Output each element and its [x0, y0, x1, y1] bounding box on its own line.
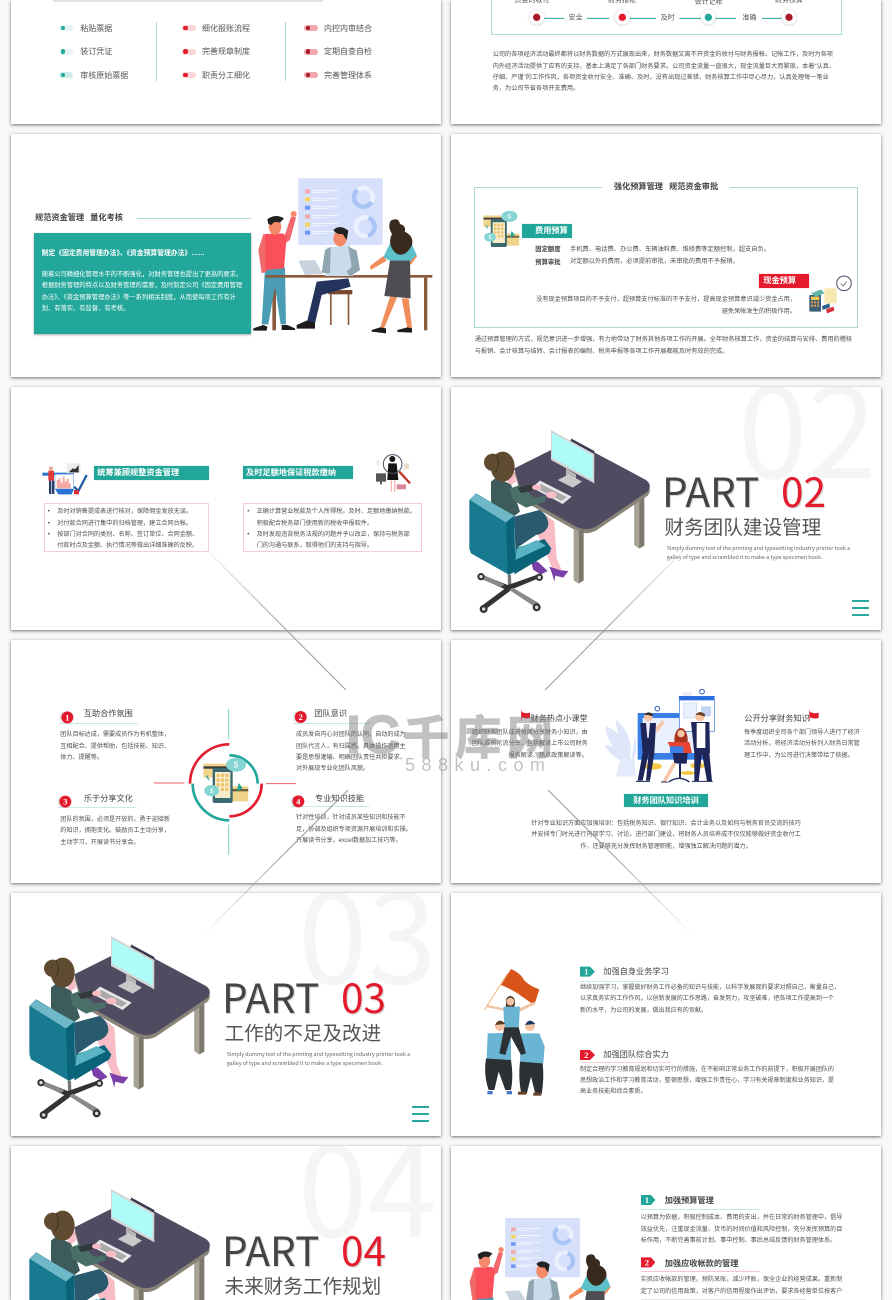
tag: expense budget: 费用预算	[535, 226, 568, 235]
part heading	[222, 966, 386, 1025]
icons	[42, 454, 411, 494]
item 4 text: 开展读书分享，excel数据加工技巧等。	[296, 837, 402, 844]
text: fund list: 对付款合同进行集中的归档管理，建立合同台帐。	[57, 520, 192, 527]
budget rows: 预算审批	[535, 259, 560, 266]
illustration and flags	[521, 688, 819, 782]
item 2 text: 思想政治工作和学习教育活动，整顿思想，增强工作责任心，学习有关规章制度和业务知识，提	[580, 1078, 834, 1084]
left text: 团队成员轮流分享，包括解读上市公司财务	[472, 740, 588, 747]
timeline nodes and labels: 及时	[661, 13, 675, 22]
panel: part 02 cover	[451, 387, 881, 630]
box title: 制定《固定费用管理办法》、《资金预算管理办法》……	[42, 250, 205, 257]
left text: 报表解读、热点政策解读等。	[508, 752, 588, 759]
timeline frame	[491, 0, 842, 34]
column 3: internal control	[304, 24, 372, 80]
item 1 text: 互相配合、提供帮助，包括技能、知识、	[60, 743, 170, 750]
box paragraph: 随着公司精细化管理水平的不断强化，对财务管理也提出了更高的要求。	[42, 271, 242, 278]
training paragraph	[531, 820, 801, 850]
item 2 text: 实抓应收帐款的管理，预防呆账，减少坏账，保全企业的经营成果。重新制	[641, 1276, 842, 1283]
part subtitle: 未来财务工作规划	[224, 1270, 381, 1299]
budget rows	[535, 245, 770, 266]
diagram: rings and numbered badges: 1	[65, 713, 69, 722]
part heading: PART	[662, 460, 759, 519]
item 4 text: 针对性培训，针对成员某些知识和技能不	[296, 814, 406, 821]
item 3 text: 的知识，拥抱变化。鼓励员工主动分享，	[60, 827, 170, 834]
summary paragraph: 公司的各项经济活动最终都将以财务数据的方式展现出来，财务数据又离不开资金的收付与财务报帐、记帐工作，及时为各项	[493, 51, 833, 58]
number tag 1	[580, 967, 595, 977]
timeline nodes and labels: 安全	[569, 13, 583, 22]
diagram: rings and numbered badges: 2	[299, 713, 303, 722]
item 1 text: 团队目标达成，需要成员作为有机整体，	[60, 731, 170, 738]
training paragraph: 作，还要够充分发挥财务管理职能，增强独立解决问题的潜力。	[580, 843, 752, 850]
summary paragraph: 内外经济活动提供了应有的支持，基本上满足了各部门财务要求。公司资金流量一直很大，现金流量巨大而繁琐，本着“认真、	[493, 63, 835, 70]
icon: phone and money	[203, 758, 248, 803]
illustration: team at dashboard	[470, 1218, 611, 1300]
number tag 1: 1	[584, 968, 588, 977]
bullets: fund list: •	[48, 520, 50, 527]
part heading	[222, 1219, 386, 1278]
english caption: galley of type and scrambled it to make a type specimen book.	[227, 1059, 383, 1067]
column 2: process refinement: 完善规章制度	[202, 47, 250, 56]
panel: part 04 cover	[11, 1146, 441, 1300]
english caption	[227, 1050, 410, 1067]
illustration: team at table with dashboard	[253, 178, 432, 334]
budget conclusion paragraph: 与报销、会计核算与结转、会计报表的编制、税务申报等各项工作开展都能及时有效的完成。	[475, 348, 728, 355]
item 1 text: 新的水平，为公司的发展，做出我应有的贡献。	[580, 1008, 707, 1014]
right title: 公开分享财务知识	[744, 714, 810, 722]
number tag 2	[580, 1050, 595, 1060]
budget rows: 手机费、电话费、办公费、车辆油料费、维修费等定额控制，超支自负。	[570, 246, 770, 253]
column 3: internal control: 内控内审结合	[324, 24, 372, 33]
illustration and number tags	[484, 966, 670, 1096]
icon: right flag	[810, 711, 819, 721]
english caption: galley of type and scrambled it to make a type specimen book.	[667, 553, 823, 561]
english caption: Simply dummy text of the printing and typesetting industry printer took a	[227, 1050, 410, 1058]
number tag 1: 1	[645, 1196, 649, 1205]
item 1 title: 加强自身业务学习	[603, 967, 669, 976]
item 3 text: 团队的氛围，必须是开放的，勇于迎接新	[60, 816, 170, 823]
item 2 text: 团队代言人，有归属感。具体操作运用主	[296, 743, 406, 750]
diagram: rings and numbered badges: 4	[296, 797, 301, 806]
part heading: PART	[222, 1219, 319, 1278]
cash budget text	[536, 295, 796, 315]
outlined frame	[474, 187, 858, 328]
right text: 活动分析，将经济活动分析列入财务日常管	[744, 740, 860, 747]
heading: 规范资金管理 量化考核	[35, 213, 123, 222]
cropped third line strip	[641, 1298, 806, 1300]
icon: magnifier inspector	[376, 455, 410, 492]
tag: team knowledge training	[624, 794, 708, 807]
tag: fund management: 统筹兼顾规整资金管理	[97, 468, 179, 477]
box paragraph: 办法》、《资金预算管理办法》等一系列相关制度，从而使每项工作有计	[42, 294, 236, 301]
icon: menu	[852, 600, 869, 616]
budget conclusion paragraph	[475, 336, 852, 355]
item 1 text: 以预算为依据，积极控制成本、费用的支出，并在日常的财务管理中，倡导	[641, 1214, 842, 1221]
illustration: woman at desk	[29, 936, 210, 1119]
item 1 text	[641, 1212, 842, 1246]
timeline nodes and labels: 准确	[742, 13, 756, 22]
part subtitle: 财务团队建设管理	[664, 511, 821, 540]
number tag 2: 2	[584, 1051, 588, 1060]
column 1: paste, bind, review: 审核原始票据	[80, 71, 128, 80]
item 1 text	[60, 730, 170, 761]
panel: part 02 cover: 02	[781, 460, 826, 519]
training paragraph: 并安排专门时光进行内部学习、讨论。进行部门建设，将财务人员培养成不仅仅能够做好资金收付工	[531, 831, 801, 838]
left text: 组织财务团队成员每周分享财务小知识，由	[472, 729, 588, 736]
icon: calculator and clock	[809, 276, 851, 313]
text: fund list: 及时对销售提成表进行核对，保障佣金发放无误。	[57, 508, 192, 515]
illustration: woman at desk	[29, 1189, 210, 1300]
panel: future plan	[451, 1146, 881, 1300]
item 3 text: 主动学习，开展读书分享会。	[60, 839, 140, 846]
right text	[744, 728, 860, 759]
panel: part 03 cover: 03	[341, 966, 386, 1025]
budget rows: 对定额以外的费用，必须提前审批，未审批的费用不予报销。	[570, 258, 739, 265]
timeline nodes and labels	[514, 0, 803, 26]
item 1 title: 互助合作氛围	[84, 709, 133, 718]
summary paragraph: 仔细、严谨”的工作作风，各项资金收付安全、准确、及时，没有出现过差错，财务核算工作中尽心尽力，认真处理每一笔业	[493, 74, 829, 81]
illustration: woman at desk	[469, 430, 650, 613]
box paragraph: 划、有落实、有监督、有考核。	[42, 305, 129, 312]
tag: tax payment: 及时足额地保证税款缴纳	[246, 468, 336, 477]
text: fund list: 付款时点及金额、执行情况等做出详细准确的反映。	[57, 542, 198, 549]
diagram: rings and numbered badges: 3	[63, 798, 67, 807]
number tags	[446, 1140, 892, 1300]
panel: strengthen learning	[451, 893, 881, 1136]
column 1: paste, bind, review	[59, 24, 128, 80]
column 2: process refinement: 细化报账流程	[202, 24, 250, 33]
training paragraph: 针对专业知识方面应加强培训：包括税务知识、银行知识、会计业务以及如何与税务官员交流的技巧	[531, 820, 801, 827]
item 2 title: 加强团队综合实力	[603, 1050, 669, 1058]
bullets: tax list	[247, 508, 250, 538]
icon: menu	[412, 1106, 429, 1122]
icon: phone and money	[483, 211, 519, 247]
part heading	[662, 460, 826, 519]
bullets: fund list	[48, 508, 50, 538]
column 1: paste, bind, review: 装订凭证	[80, 47, 112, 56]
part subtitle: 工作的不足及改进	[224, 1017, 381, 1046]
panel: knowledge training	[451, 640, 881, 883]
column 2: process refinement: 职责分工细化	[202, 71, 250, 80]
bullets: tax list: •	[247, 531, 249, 538]
heading	[602, 181, 730, 193]
box: fund list	[44, 503, 209, 552]
illustration: team holding flag	[484, 969, 545, 1096]
tag: cash budget	[759, 274, 809, 288]
item 2 text: 对外展现专业化团队风貌。	[296, 765, 369, 772]
budget conclusion paragraph: 通过预算管理的方式，规范意识进一步增强，有力地带动了财务其他各项工作的开展。全年财务核算工作，资金的结算与安排、费用的稽核	[475, 336, 852, 343]
cash budget text: 没有现金预算项目的不予支付，超预算支付标准的不予支付，提高现金预算意识减少资金占用，	[536, 296, 796, 303]
item 2 text	[580, 1065, 834, 1095]
panel: safety accuracy timeline	[451, 0, 881, 124]
panel: expense process checklist	[11, 0, 441, 124]
number tag 2	[641, 1257, 655, 1267]
icons	[483, 210, 852, 314]
item 1 text: 继续加强学习，掌握做好财务工作必备的知识与技能，以科学发展观的要求对照自己，衡量自己，	[580, 985, 840, 991]
item 2 text: 要是思想灌输、明确团队责任共担要求，	[296, 754, 406, 761]
item 2 text: 成员发自内心对团队的认同，自动的成为	[296, 731, 406, 738]
number tag 1	[641, 1195, 655, 1205]
item 3 title: 乐于分享文化	[84, 794, 133, 802]
text: tax list	[257, 508, 416, 549]
item 1 text: 以求真务实的工作作风，以创新发展的工作思路，奋发努力，攻坚破难，把各项工作提高到一个	[580, 996, 834, 1002]
item 2 text	[641, 1274, 842, 1297]
text: tax list: 及时发现违背税务法规的问题并予以改正，保持与税务部	[257, 531, 410, 538]
summary paragraph	[493, 50, 835, 92]
column 2: process refinement	[182, 24, 250, 80]
item 2 text: 定了公司的信用政策，对客户的信用程度作出评估，要求各经营单位按客户	[641, 1288, 842, 1295]
summary paragraph: 务，为公司节省各项开支费用。	[493, 85, 579, 92]
watermark: diagonal lines and 588ku logo: 千库网	[403, 712, 559, 764]
budget rows: 固定额度	[535, 246, 560, 253]
text: tax list: 门的沟通与联系，取得他们的支持与指导。	[257, 542, 373, 549]
item 1 text: 效益优先，注重现金流量、货币的时间价值和风险控制，充分发挥预算的目	[641, 1226, 842, 1233]
tag: cash budget: 现金预算	[763, 276, 796, 285]
heading: 强化预算管理 规范资金审批	[614, 182, 718, 191]
watermark: diagonal lines and 588ku logo: 588ku.com	[405, 755, 552, 775]
panel: team building four points	[11, 640, 441, 883]
item 2 text: 制定合理的学习教育规划和切实可行的措施，在不影响正常业务工作的前提下，积极开展团队的	[580, 1067, 834, 1073]
text: fund list	[57, 508, 198, 549]
tag: tax payment	[243, 466, 353, 479]
diagram: rings and numbered badges	[57, 709, 371, 855]
right text: 理工作中，为公司进行决策带给了依据。	[744, 752, 854, 759]
panel: standardised fund management	[11, 134, 441, 377]
item 1 text: 标作用，不断完善事前计划、事中控制、事后总结反馈的财务管理体系。	[641, 1237, 836, 1244]
box paragraph	[42, 270, 242, 312]
item 2 text: 高业务技能和综合素质。	[580, 1089, 647, 1095]
column 3: internal control: 定期自查自检	[324, 47, 372, 56]
bullets: fund list: •	[48, 531, 50, 538]
illustration: finance team	[604, 689, 714, 782]
panel: part 03 cover	[11, 893, 441, 1136]
item 1 title: 加强预算管理	[665, 1196, 714, 1204]
text: tax list: 正确计算营业税款及个人所得税。及时、足额地缴纳税款。	[257, 508, 416, 515]
icon: analyst with chart	[42, 463, 87, 494]
right text: 每季度组织全司各个部门领导人进行了经济	[744, 729, 860, 736]
cash budget text: 避免呆帐发生的积极作用。	[722, 308, 796, 315]
english caption: Simply dummy text of the printing and typesetting industry printer took a	[667, 544, 850, 552]
box: tax list	[243, 503, 422, 552]
item 2 text	[296, 730, 406, 772]
item 1 text	[580, 984, 840, 1014]
watermark: diagonal lines and 588ku logo: IC	[346, 705, 400, 765]
icon: left flag	[521, 711, 530, 721]
item 4 text	[296, 814, 412, 844]
item 4 text: 足，协调及组织专项资源开展培训和实操。	[296, 826, 412, 833]
panel: part 04 cover: 04	[341, 1219, 386, 1278]
left title: 财务热点小课堂	[530, 714, 588, 722]
column 1: paste, bind, review: 粘贴票据	[80, 24, 112, 33]
text: tax list: 积极配合税务部门使用新的税收申报软件。	[257, 520, 373, 527]
cropped text strip	[53, 0, 323, 2]
bullets: tax list: •	[247, 508, 249, 515]
tag: expense budget	[522, 224, 572, 238]
item 3 text	[60, 815, 170, 846]
text: fund list: 按部门对合同的类别、名称、签订单位、合同金额、	[57, 531, 198, 538]
panel: budget management	[451, 134, 881, 377]
item 4 title: 专业知识技能	[315, 794, 364, 802]
item 1 text: 体力、提醒等。	[60, 754, 103, 761]
part heading: PART	[222, 966, 319, 1025]
item 2 title: 加强应收帐款的管理	[665, 1259, 738, 1268]
column 3: internal control: 完善管理体系	[324, 71, 372, 80]
left text	[472, 728, 588, 759]
tag: team knowledge training: 财务团队知识培训	[633, 796, 699, 805]
teal text box	[34, 233, 251, 334]
box paragraph: 根据财务管理的特点以及财务管理的需要，及时制定公司《固定费用管理	[42, 282, 242, 289]
english caption	[667, 544, 850, 561]
bullets: fund list: •	[48, 508, 50, 515]
number tag 2: 2	[645, 1258, 649, 1267]
panel: fund and tax management	[11, 387, 441, 630]
tag: fund management	[94, 466, 209, 480]
item 2 title: 团队意识	[314, 709, 347, 718]
